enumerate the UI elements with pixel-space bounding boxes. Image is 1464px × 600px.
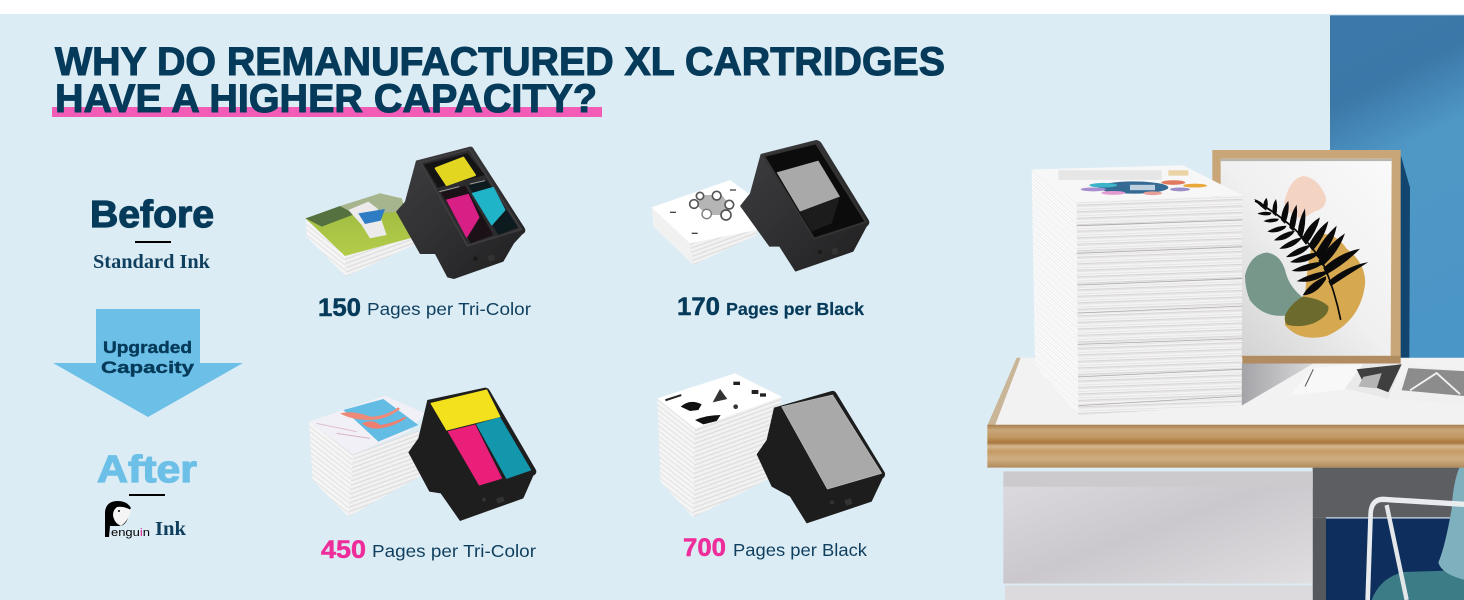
- arrow: upgraded capacity: Capacity: [101, 358, 195, 377]
- caption: 450 pages per tri-color: Pages per Tri-Color: [372, 541, 536, 561]
- icon: penguin ink logo: Ink: [155, 518, 187, 540]
- open magazine: [1290, 364, 1464, 404]
- desk top: [987, 356, 1464, 468]
- caption: 700 pages per black: [683, 534, 867, 562]
- desk drawers: [1003, 471, 1313, 600]
- panel: before black cartridge: [652, 140, 869, 272]
- heading: before: Before: [90, 194, 214, 236]
- panel: before tri-color cartridge: [306, 147, 525, 279]
- ink cartridge: [757, 391, 885, 523]
- caption: 150 pages per tri-color: 150: [318, 294, 361, 322]
- art: gold shape: [1285, 234, 1365, 338]
- caption: 450 pages per tri-color: [321, 536, 536, 564]
- icon: penguin ink logo: [105, 501, 187, 540]
- title: [52, 40, 945, 121]
- blue wall: [1330, 15, 1464, 360]
- text: standard ink: Standard Ink: [93, 251, 211, 273]
- caption: 700 pages per black: 700: [683, 534, 726, 562]
- panel: after label: [97, 449, 197, 540]
- caption: 170 pages per black: 170: [677, 293, 720, 321]
- caption: 450 pages per tri-color: 450: [321, 536, 366, 564]
- title line 1: WHY DO REMANUFACTURED XL CARTRIDGES: [55, 40, 945, 84]
- ink cartridge: [408, 388, 536, 521]
- caption: 170 pages per black: [677, 293, 864, 321]
- document paper stack: [657, 373, 782, 518]
- panel: after black cartridge: [657, 373, 885, 523]
- art: fern: [1254, 198, 1368, 320]
- panel: desk scene: [987, 15, 1464, 600]
- caption: 150 pages per tri-color: Pages per Tri-Color: [367, 299, 531, 319]
- art: green shape: [1245, 253, 1302, 316]
- title line 2: HAVE A HIGHER CAPACITY?: [55, 77, 597, 121]
- panel: before label: [90, 194, 214, 273]
- caption: 150 pages per tri-color: [318, 294, 531, 322]
- heading: after: After: [97, 449, 197, 491]
- ink cartridge: [740, 140, 869, 272]
- ink cartridge: [396, 147, 525, 279]
- caption: 700 pages per black: Pages per Black: [733, 540, 867, 560]
- caption: 170 pages per black: Pages per Black: [726, 299, 864, 319]
- icon: penguin ink logo: engu in: [111, 527, 150, 539]
- title underline: [52, 107, 602, 117]
- art: peach shape: [1284, 176, 1326, 218]
- printed page artwork: [1058, 170, 1207, 195]
- art: overlap shape: [1285, 297, 1328, 326]
- arrow label: Upgraded: [103, 338, 192, 357]
- document paper stack: [652, 180, 757, 265]
- paper stack: [1032, 165, 1242, 415]
- panel: after tri-color cartridge: [309, 388, 536, 521]
- chair: [1368, 459, 1464, 600]
- desk underside: [1313, 468, 1464, 600]
- photo paper stack: [306, 193, 413, 277]
- flamingo paper stack: [309, 396, 425, 517]
- picture frame: [1212, 150, 1410, 364]
- arrow: upgraded capacity: [53, 309, 243, 417]
